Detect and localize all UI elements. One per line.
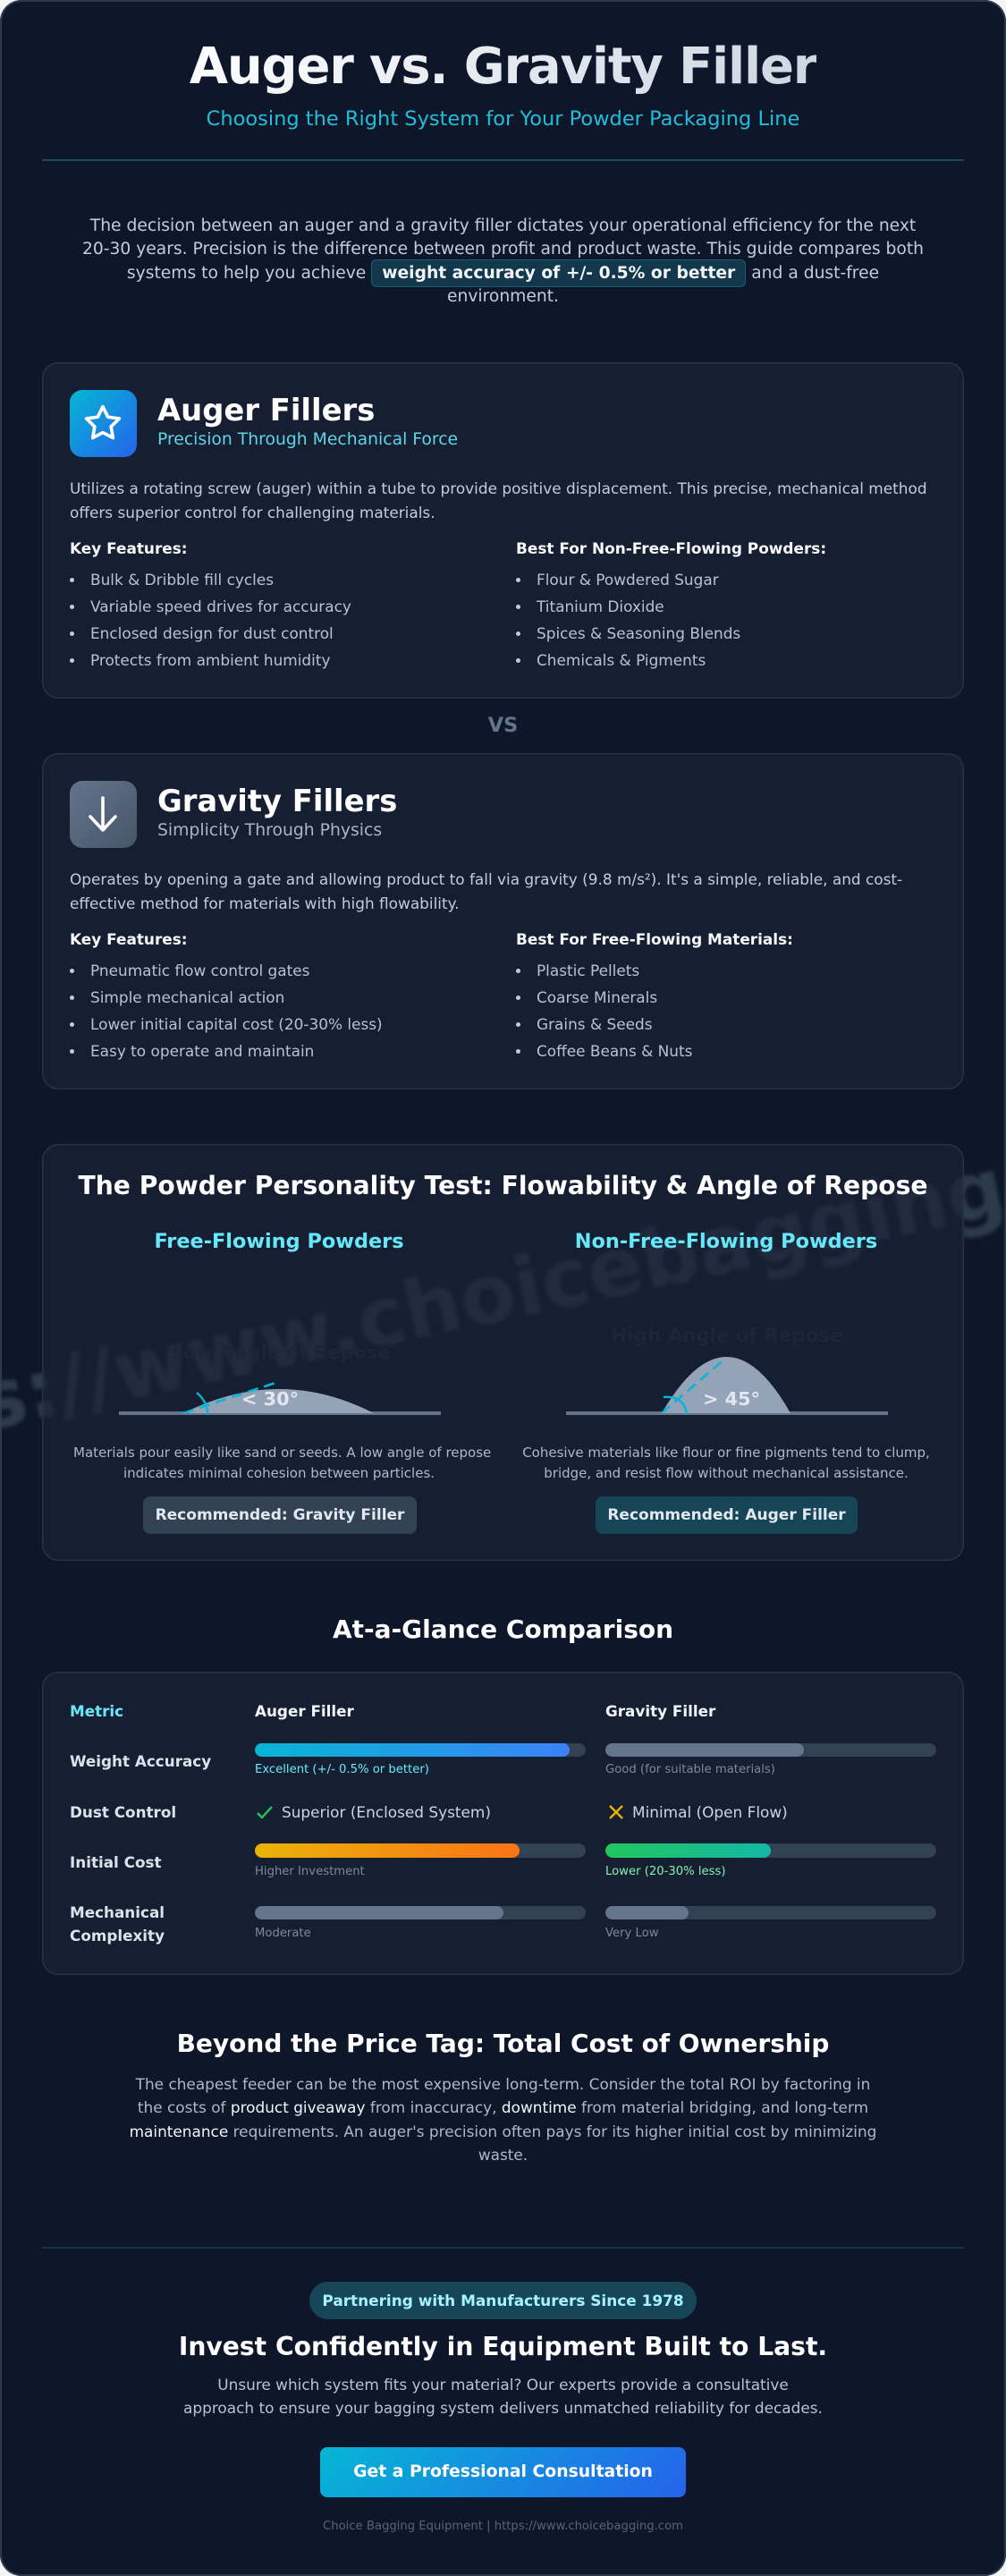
panel: gravity fillers <box>42 753 964 1089</box>
key features list: Pneumatic flow control gates <box>90 962 309 979</box>
key features list: Easy to operate and maintain <box>90 1042 314 1060</box>
bar: gravity cost <box>605 1843 936 1858</box>
column header: auger: Auger Filler <box>255 1702 354 1720</box>
row label: dust control: Dust Control <box>70 1803 176 1821</box>
footer divider <box>42 2247 964 2249</box>
bar: gravity accuracy <box>605 1743 936 1757</box>
description: free-flowing: indicates minimal cohesion between particles. <box>123 1465 435 1481</box>
caption: auger complexity: Moderate <box>255 1927 311 1940</box>
panel heading: The Powder Personality Test: Flowability & Angle of Repose <box>78 1171 928 1200</box>
row label: mechanical complexity <box>70 1903 165 1945</box>
icon: check <box>257 1806 273 1819</box>
icon: arrow down <box>70 781 137 848</box>
caption: gravity complexity: Very Low <box>605 1927 658 1940</box>
bar: auger cost <box>255 1843 586 1858</box>
column header: metric: Metric <box>70 1702 123 1720</box>
cta text: Unsure which system fits your material? Our experts provide a consultative <box>217 2376 789 2394</box>
best for list: Flour & Powdered Sugar <box>537 571 719 589</box>
key features heading: Key Features: <box>70 930 188 948</box>
value: gravity dust control: Minimal (Open Flow) <box>632 1803 788 1821</box>
best for heading: Best For Non-Free-Flowing Powders: <box>516 539 826 557</box>
best for list: Titanium Dioxide <box>537 597 664 615</box>
key features list: Protects from ambient humidity <box>90 651 330 669</box>
bar: auger accuracy <box>255 1743 586 1757</box>
diagram: high angle of repose: High Angle of Repose <box>611 1325 843 1347</box>
badge: auger filler: Recommended: Auger Filler <box>607 1506 846 1524</box>
key features list: Bulk & Dribble fill cycles <box>90 571 274 589</box>
description: non-free-flowing: Cohesive materials like flour or fine pigments tend to clump, <box>522 1445 930 1461</box>
total cost of ownership text: The cheapest feeder can be the most expensive long-term. Consider the total ROI by factoring in <box>136 2075 870 2093</box>
description <box>70 479 927 521</box>
cta button: Get a Professional Consultation <box>353 2462 653 2481</box>
best for list: Spices & Seasoning Blends <box>537 624 740 642</box>
heading: Gravity Fillers <box>157 784 397 818</box>
subheading: Simplicity Through Physics <box>157 821 382 840</box>
best for list: Coffee Beans & Nuts <box>537 1042 692 1060</box>
row label: mechanical complexity: Complexity <box>70 1927 165 1945</box>
header divider <box>42 159 964 161</box>
best for list: Chemicals & Pigments <box>537 651 706 669</box>
key features heading: Key Features: <box>70 539 188 557</box>
best for list: Coarse Minerals <box>537 988 657 1006</box>
key features list <box>70 571 351 669</box>
diagram: low angle of repose: Low Angle of Repose <box>172 1342 390 1363</box>
key features list: Lower initial capital cost (20-30% less) <box>90 1015 383 1033</box>
row label: weight accuracy: Weight Accuracy <box>70 1752 211 1770</box>
badge: gravity filler <box>143 1496 417 1534</box>
pill: since 1978: Partnering with Manufacturers Since 1978 <box>322 2292 684 2309</box>
column heading: non-free-flowing: Non-Free-Flowing Powders <box>575 1230 877 1253</box>
row label: mechanical complexity: Mechanical <box>70 1903 165 1921</box>
cta text <box>183 2376 823 2417</box>
total cost of ownership text: the costs of product giveaway from inaccuracy, downtime from material bridging, and long-term <box>138 2098 868 2116</box>
bar: gravity complexity <box>605 1906 936 1919</box>
total cost of ownership heading: Beyond the Price Tag: Total Cost of Ownership <box>177 2029 829 2058</box>
title: Auger vs. Gravity Filler <box>190 38 816 96</box>
description: free-flowing: Materials pour easily like sand or seeds. A low angle of repose <box>73 1445 491 1461</box>
panel: auger fillers <box>42 362 964 699</box>
panel: comparison table <box>42 1672 964 1975</box>
best for list: Grains & Seeds <box>537 1015 653 1033</box>
description: free-flowing <box>73 1445 491 1481</box>
diagram: high angle of repose: > 45° <box>703 1388 760 1410</box>
heading: Auger Fillers <box>157 393 375 428</box>
intro paragraph <box>82 216 924 306</box>
description: effective method for materials with high flowability. <box>70 894 460 912</box>
diagram: low angle of repose: < 30° <box>241 1388 299 1410</box>
vs label: VS <box>488 714 518 737</box>
description: Operates by opening a gate and allowing product to fall via gravity (9.8 m/s²). It's a simple, reliable, and cost- <box>70 870 902 888</box>
caption: gravity accuracy: Good (for suitable materials) <box>605 1763 775 1776</box>
description: non-free-flowing: bridge, and resist flow without mechanical assistance. <box>544 1465 909 1481</box>
key features list <box>70 962 383 1060</box>
description: Utilizes a rotating screw (auger) within a tube to provide positive displacement. This precise, mechanical method <box>70 479 927 497</box>
total cost of ownership text: waste. <box>478 2146 528 2164</box>
best for list <box>516 962 692 1060</box>
comparison heading: At-a-Glance Comparison <box>333 1614 673 1644</box>
cta text: approach to ensure your bagging system delivers unmatched reliability for decades. <box>183 2399 823 2417</box>
key features list: Enclosed design for dust control <box>90 624 334 642</box>
icon: star <box>70 390 137 457</box>
value: auger dust control: Superior (Enclosed System) <box>282 1803 491 1821</box>
subheading: Precision Through Mechanical Force <box>157 430 458 449</box>
caption: auger accuracy: Excellent (+/- 0.5% or better) <box>255 1763 429 1776</box>
column header: gravity: Gravity Filler <box>605 1702 715 1720</box>
row label: initial cost: Initial Cost <box>70 1853 161 1871</box>
panel: powder personality test <box>42 1144 964 1561</box>
total cost of ownership text: maintenance requirements. An auger's precision often pays for its higher initial cost by minimizing <box>130 2123 876 2140</box>
intro paragraph: 20-30 years. Precision is the difference between profit and product waste. This guide compares both <box>82 240 924 258</box>
key features list: Simple mechanical action <box>90 988 284 1006</box>
column heading: free-flowing: Free-Flowing Powders <box>154 1230 404 1253</box>
diagram: high angle of repose <box>566 1325 888 1415</box>
cta button <box>320 2447 686 2497</box>
best for list: Plastic Pellets <box>537 962 639 979</box>
description: non-free-flowing <box>522 1445 930 1481</box>
intro paragraph: systems to help you achieve weight accuracy of +/- 0.5% or better and a dust-free <box>127 264 879 283</box>
caption: gravity cost: Lower (20-30% less) <box>605 1865 726 1878</box>
subtitle: Choosing the Right System for Your Powder Packaging Line <box>207 107 799 131</box>
key features list: Variable speed drives for accuracy <box>90 597 351 615</box>
footer text: Choice Bagging Equipment | https://www.choicebagging.com <box>323 2520 683 2533</box>
diagram: low angle of repose <box>119 1342 441 1415</box>
pill: since 1978 <box>309 2282 697 2319</box>
bar: auger complexity <box>255 1906 586 1919</box>
intro paragraph: environment. <box>447 287 559 306</box>
badge: auger filler <box>596 1496 858 1534</box>
intro paragraph: The decision between an auger and a gravity filler dictates your operational efficiency for the next <box>90 216 916 235</box>
badge: gravity filler: Recommended: Gravity Filler <box>156 1506 404 1524</box>
description <box>70 870 902 912</box>
caption: auger cost: Higher Investment <box>255 1865 365 1878</box>
icon: cross <box>609 1805 623 1819</box>
total cost of ownership text <box>130 2075 876 2164</box>
best for heading: Best For Free-Flowing Materials: <box>516 930 793 948</box>
best for list <box>516 571 740 669</box>
description: offers superior control for challenging materials. <box>70 503 435 521</box>
cta heading: Invest Confidently in Equipment Built to Last. <box>179 2332 827 2361</box>
